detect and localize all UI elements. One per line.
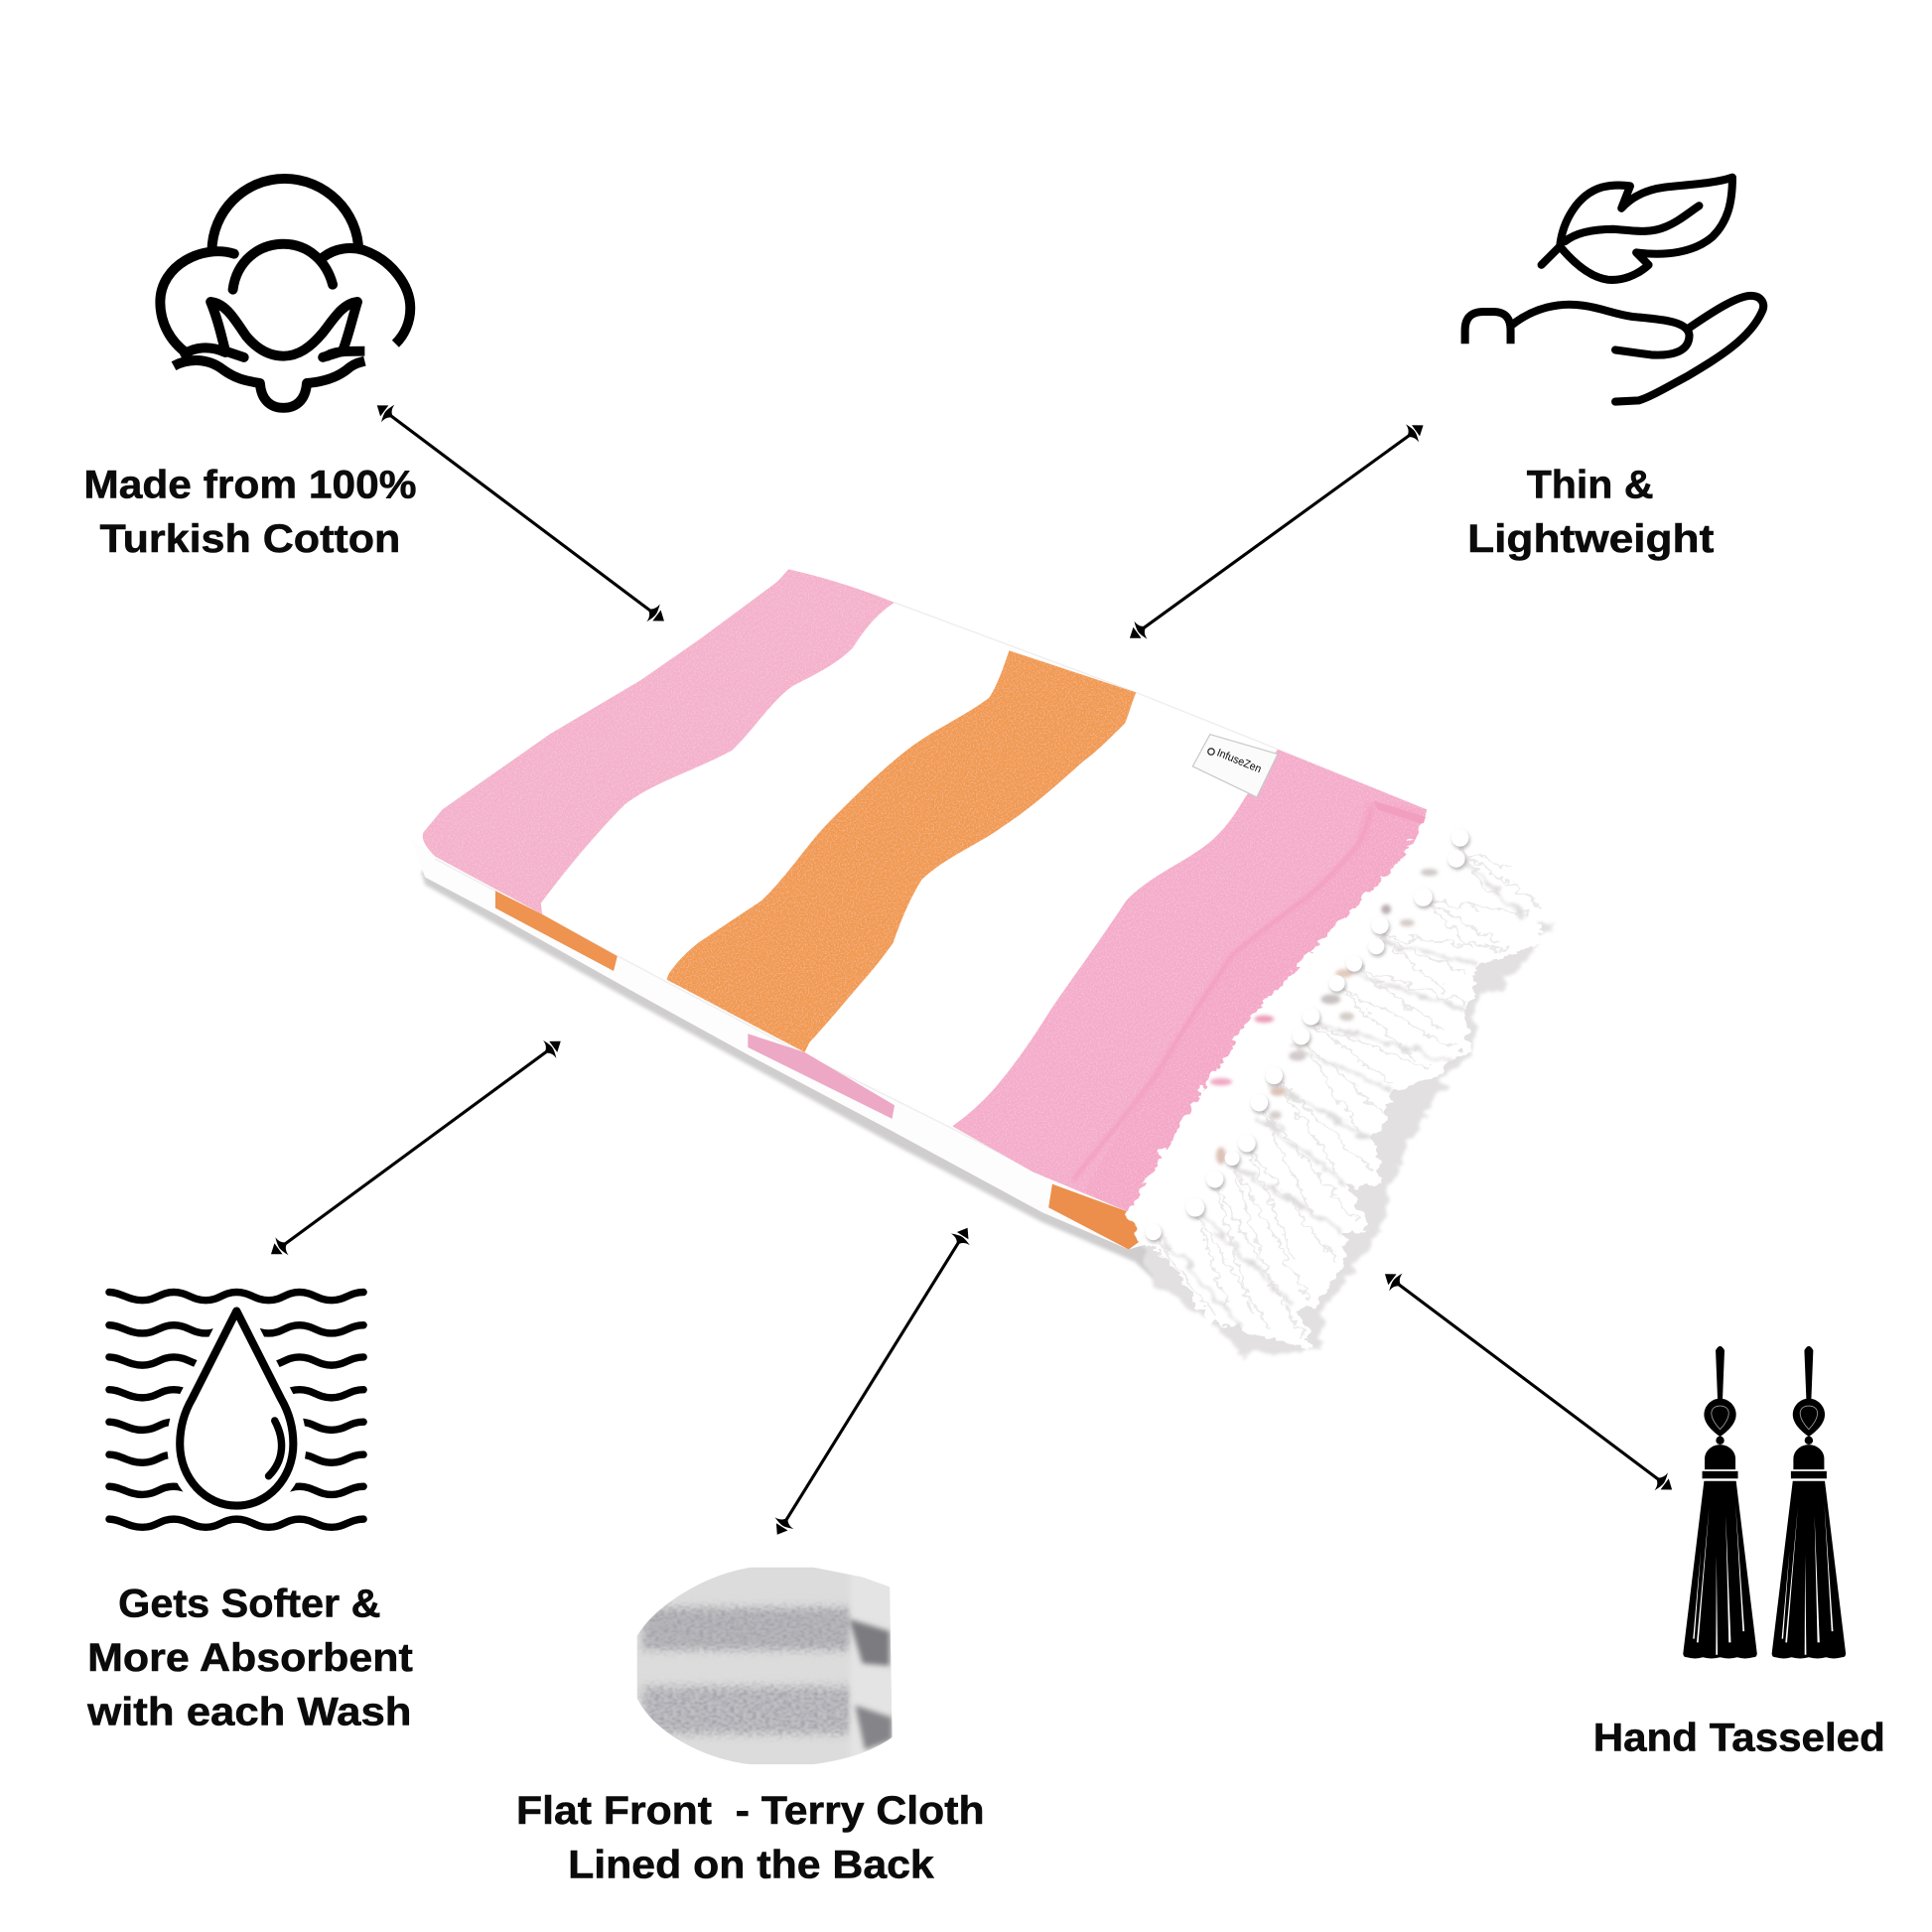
side stripe: pink middle [748, 1034, 895, 1119]
label: tassels: Hand Tasseled [1593, 1717, 1885, 1760]
label: lightweight: Lightweight [1467, 517, 1714, 561]
hem slot [1374, 801, 1426, 824]
side stripe: orange right [1048, 1184, 1142, 1249]
label: terry cloth: Lined on the Back [568, 1843, 935, 1886]
stripe: left pink [423, 569, 895, 914]
hem band [1084, 801, 1427, 1212]
icon: leaf in hand [1465, 178, 1763, 402]
side stripe: orange left [495, 891, 618, 971]
arrow: terry cloth to towel [767, 1222, 977, 1541]
arrow: absorbent to towel [264, 1033, 567, 1263]
label: absorbent [86, 1582, 413, 1733]
towel side layers [412, 840, 1146, 1249]
label: cotton: Turkish Cotton [100, 517, 400, 561]
strands [1154, 850, 1540, 1337]
towel top surface [424, 569, 1427, 1212]
icon: tassel right [1772, 1346, 1846, 1658]
label: cotton: Made from 100% [83, 463, 416, 506]
arrow: tassels to towel [1378, 1265, 1679, 1498]
care label tag: InfuseZen [1215, 747, 1263, 775]
tassel gaps and voids [1210, 869, 1438, 1165]
label: lightweight: Thin & [1527, 463, 1654, 506]
label: absorbent: Gets Softer & [118, 1582, 380, 1625]
towel photo [412, 569, 1555, 1354]
icon: cotton boll [160, 179, 410, 408]
tassel separations [1165, 853, 1525, 1324]
towel ground shadow [421, 869, 1182, 1282]
icon: water drop and waves [109, 1293, 363, 1527]
care label tag [1192, 735, 1278, 797]
stripe: right pink [952, 750, 1427, 1212]
tassel knots [1146, 829, 1468, 1240]
label: cotton [83, 463, 416, 561]
label: absorbent: More Absorbent [87, 1636, 413, 1680]
icon: tassel left [1683, 1346, 1757, 1658]
arrow: lightweight to towel [1123, 416, 1430, 647]
label: lightweight [1467, 463, 1714, 561]
fringe tassels [1130, 819, 1555, 1345]
label: absorbent: with each Wash [86, 1691, 412, 1734]
fringe white mass [1130, 819, 1555, 1345]
label: terry cloth: Flat Front - Terry Cloth [516, 1789, 985, 1833]
image: terry cloth swatch [637, 1567, 892, 1765]
fringe ground shadow [1141, 924, 1555, 1354]
arrow: cotton to towel [370, 396, 671, 629]
label: terry cloth [516, 1789, 985, 1886]
stripes on towel top [423, 569, 1427, 1212]
stripe: orange centre [666, 650, 1136, 1052]
